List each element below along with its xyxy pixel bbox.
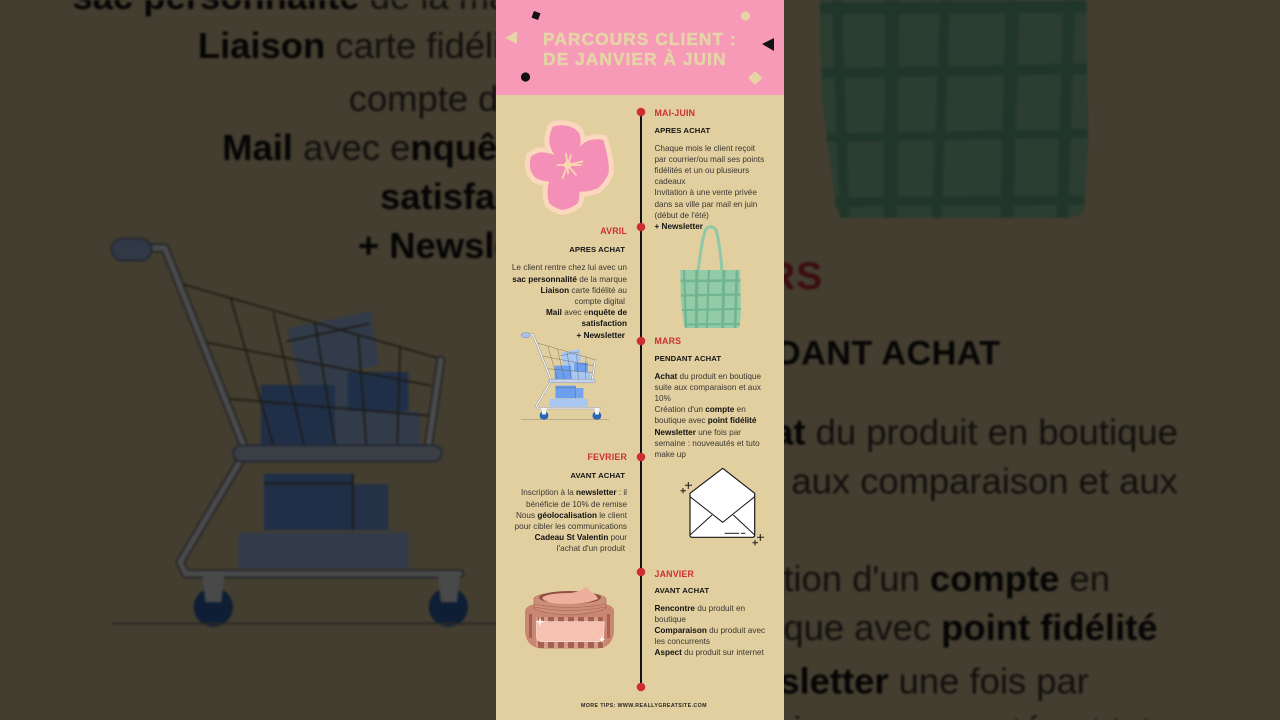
background: enlarged blurred copy of the infographic: Achat du produit en boutique bbox=[704, 411, 1178, 451]
title: PARCOURS CLIENT : bbox=[543, 28, 737, 48]
body text: pour cibler les communications bbox=[515, 522, 627, 531]
body text: Création d'un compte en bbox=[654, 405, 746, 414]
stage heading: PENDANT ACHAT bbox=[654, 354, 721, 362]
body text bbox=[515, 488, 627, 553]
stage heading: APRES ACHAT bbox=[654, 126, 710, 134]
background: enlarged blurred copy of the infographic: Liaison carte fidélité au bbox=[198, 28, 582, 68]
section: mars bbox=[654, 336, 761, 459]
stage heading: APRES ACHAT bbox=[569, 245, 625, 254]
icon: pink flower bbox=[525, 120, 614, 215]
body text: sac personnalité de la marque bbox=[512, 275, 627, 284]
body text: les concurrents bbox=[654, 637, 710, 646]
background: enlarged blurred copy of the infographic: PENDANT ACHAT bbox=[704, 331, 1001, 371]
body text: dans sa ville par mail en juin bbox=[654, 200, 757, 209]
background: enlarged blurred copy of the infographic: boutique avec point fidélité bbox=[704, 610, 1157, 650]
body text: (début de l'été) bbox=[654, 211, 709, 220]
body text: Comparaison du produit avec bbox=[654, 626, 765, 635]
body text: cadeaux bbox=[654, 177, 685, 186]
body text: Achat du produit en boutique bbox=[654, 372, 761, 380]
section: mai-juin bbox=[654, 108, 764, 231]
body text: semaine : nouveautés et tuto bbox=[654, 439, 760, 448]
month label: JANVIER bbox=[654, 568, 694, 578]
background: enlarged blurred copy of the infographic: compte digital bbox=[349, 78, 573, 118]
body text bbox=[654, 372, 761, 459]
body text: Mail avec enquête de bbox=[546, 308, 627, 317]
body text: fidélités et un ou plusieurs bbox=[654, 166, 749, 175]
body text: Cadeau St Valentin pour bbox=[535, 533, 627, 542]
stage heading: AVANT ACHAT bbox=[570, 470, 625, 480]
body text: + Newsletter bbox=[577, 331, 625, 340]
background: enlarged blurred copy of the infographic: Mail avec enquête de bbox=[222, 128, 582, 168]
month label: MARS bbox=[654, 336, 681, 346]
infographic panel bbox=[496, 0, 784, 720]
section: fevrier bbox=[515, 452, 627, 553]
body text: suite aux comparaison et aux bbox=[654, 383, 761, 392]
body text: satisfaction bbox=[582, 319, 627, 328]
icon: cream jar bbox=[525, 587, 614, 648]
body text bbox=[512, 263, 627, 340]
body text: make up bbox=[654, 450, 686, 459]
body text: Chaque mois le client reçoit bbox=[654, 144, 755, 152]
section: avril bbox=[512, 226, 627, 340]
body text: + Newsletter bbox=[654, 222, 703, 231]
month label: MAI-JUIN bbox=[654, 108, 695, 118]
body text bbox=[654, 144, 764, 231]
background: enlarged blurred copy of the infographic: + Newsletter bbox=[358, 228, 573, 268]
icon: green tote bag bbox=[680, 225, 741, 328]
body text: 10% bbox=[654, 394, 671, 403]
body text: Inscription à la newsletter : il bbox=[521, 488, 627, 497]
background: enlarged blurred copy of the infographic: Newsletter une fois par bbox=[704, 660, 1089, 700]
body text: Nous géolocalisation le client bbox=[516, 511, 627, 520]
body text bbox=[654, 604, 765, 657]
body text: Liaison carte fidélité au bbox=[541, 286, 627, 295]
body text: boutique avec point fidélité bbox=[654, 416, 756, 425]
icon: open envelope bbox=[680, 468, 764, 546]
background: enlarged blurred copy of the infographic: Création d'un compte en bbox=[704, 560, 1110, 600]
body text: compte digital bbox=[574, 297, 625, 306]
body text: bénéficie de 10% de remise bbox=[526, 500, 627, 509]
body text: Rencontre du produit en bbox=[654, 604, 745, 612]
body text: boutique bbox=[654, 615, 686, 624]
body text: par courrier/ou mail ses points bbox=[654, 155, 764, 164]
background: enlarged blurred copy of the infographic: 10% bbox=[704, 511, 777, 551]
title: DE JANVIER À JUIN bbox=[543, 48, 727, 68]
footer text: MORE TIPS: WWW.REALLYGREATSITE.COM bbox=[581, 703, 707, 709]
background: enlarged blurred copy of the infographic: suite aux comparaison et aux bbox=[704, 461, 1178, 501]
decorative confetti shapes bbox=[505, 11, 774, 85]
section: janvier bbox=[654, 568, 765, 657]
icon: shopping cart bbox=[520, 332, 609, 420]
body text: Le client rentre chez lui avec un bbox=[512, 263, 627, 272]
header band bbox=[496, 0, 784, 95]
stage heading: AVANT ACHAT bbox=[654, 586, 709, 595]
month label: AVRIL bbox=[600, 226, 627, 236]
title bbox=[543, 28, 737, 68]
body text: Newsletter une fois par bbox=[654, 428, 741, 437]
body text: l'achat d'un produit bbox=[557, 544, 625, 553]
month label: FEVRIER bbox=[587, 452, 627, 462]
body text: Aspect du produit sur internet bbox=[654, 648, 764, 657]
timeline axis bbox=[636, 108, 646, 692]
body text: Invitation à une vente privée bbox=[654, 188, 757, 197]
background: enlarged blurred copy of the infographic: MARS bbox=[704, 253, 823, 298]
background: enlarged blurred copy of the infographic: satisfaction bbox=[380, 178, 582, 218]
